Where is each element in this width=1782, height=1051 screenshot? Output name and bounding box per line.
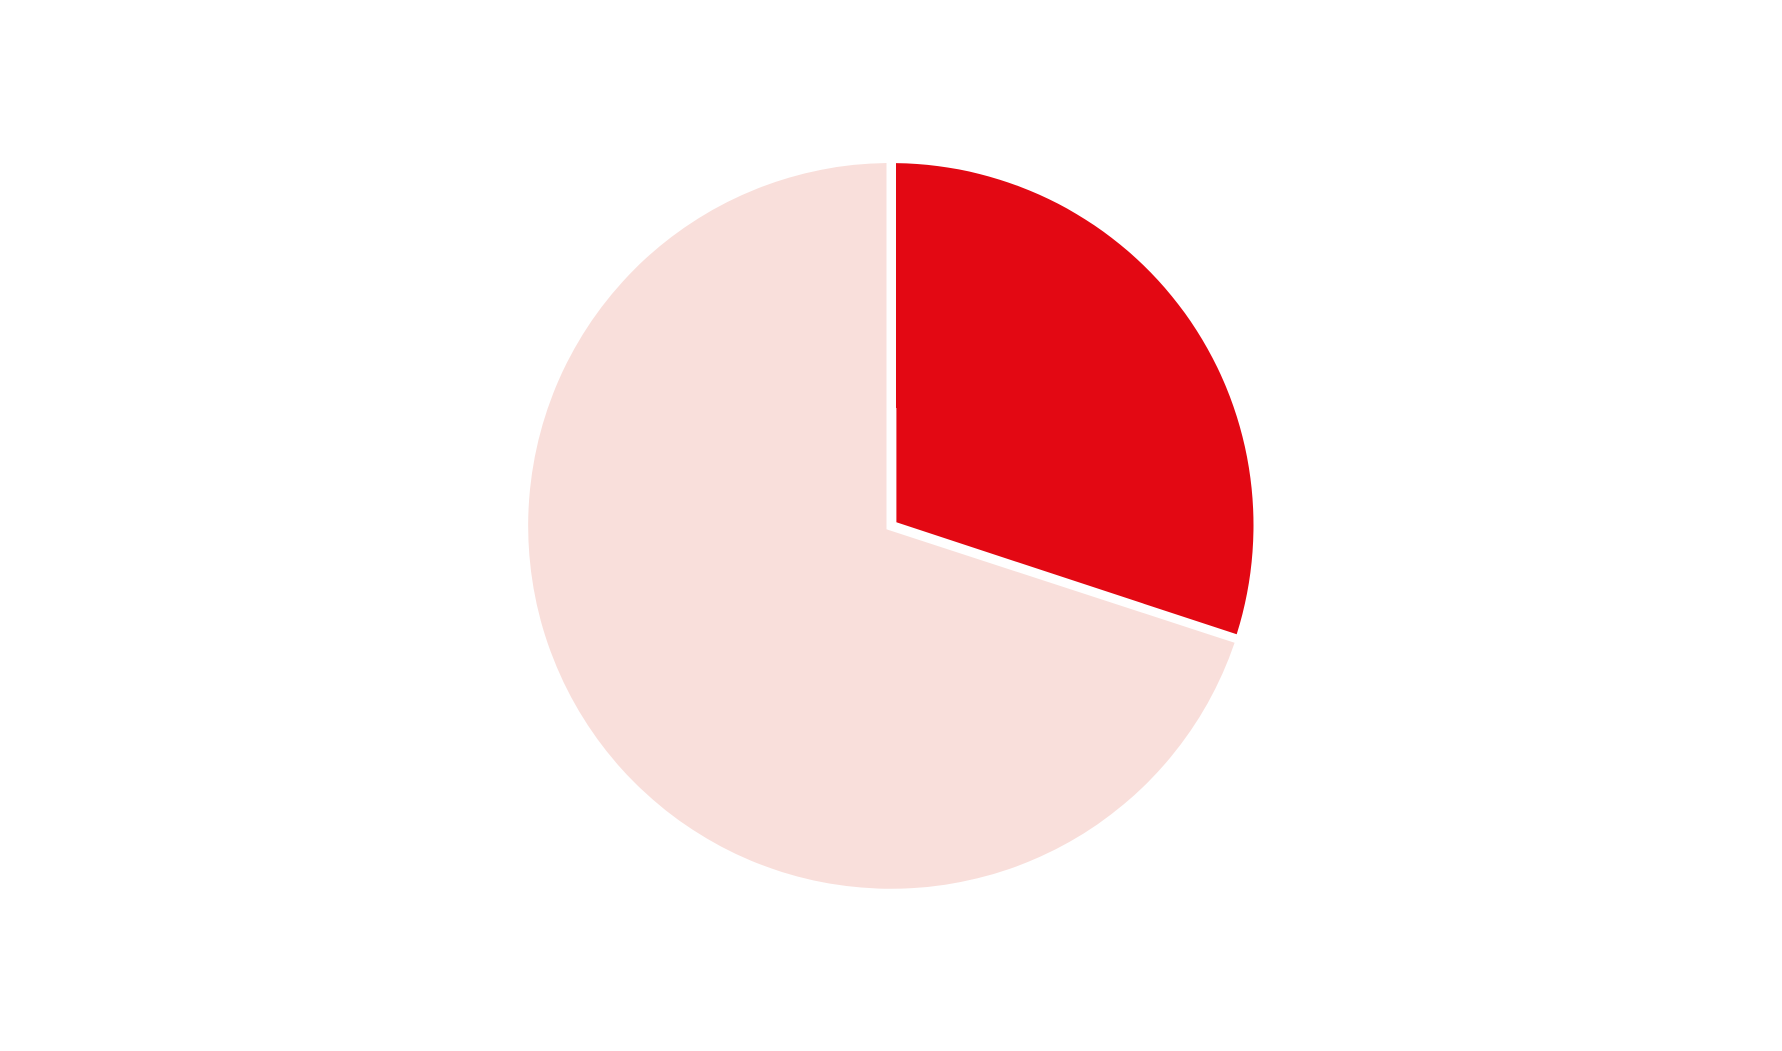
pie slice: smaller red share bbox=[896, 163, 1253, 634]
pie slice: large pale pink share bbox=[528, 163, 1235, 889]
